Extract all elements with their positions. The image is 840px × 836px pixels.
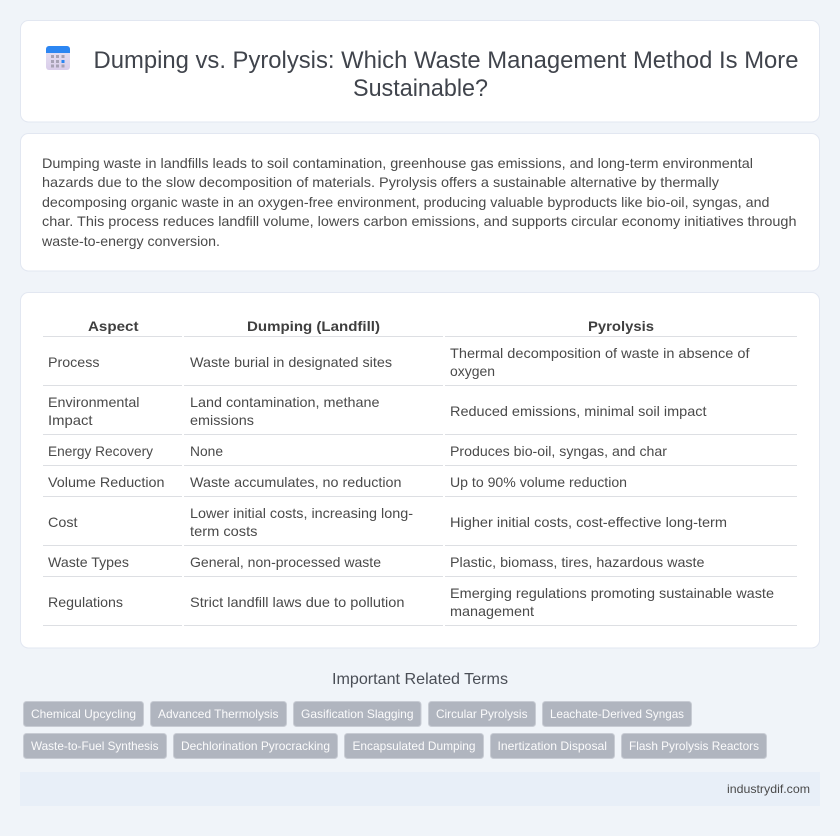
table header: Pyrolysis: [588, 318, 654, 334]
row: environmental impact: Environmental: [48, 394, 140, 410]
row: environmental impact: Reduced emissions, minimal soil impact: [450, 403, 707, 419]
row: regulations: [48, 585, 774, 619]
tag: Waste-to-Fuel Synthesis: Waste-to-Fuel Synthesis: [31, 739, 158, 753]
related terms heading: Important Related Terms: [332, 671, 508, 688]
tag: Inertization Disposal: [490, 734, 614, 758]
row: waste types: [48, 554, 705, 570]
tag: Waste-to-Fuel Synthesis: [24, 734, 166, 758]
row: cost: Higher initial costs, cost-effective long-term: [450, 514, 727, 530]
row: energy recovery: Produces bio-oil, syngas, and char: [450, 443, 667, 459]
footer bar: [20, 772, 820, 806]
row: waste types: Waste Types: [48, 554, 129, 570]
row: process: Thermal decomposition of waste in absence of: [450, 345, 750, 361]
row: cost: Cost: [48, 514, 78, 530]
table header: Aspect: [88, 318, 139, 334]
table header: Dumping (Landfill): [247, 318, 380, 334]
description text: Dumping waste in landfills leads to soil contamination, greenhouse gas emissions, and long-term environmental: [42, 155, 753, 171]
row: energy recovery: [48, 443, 667, 459]
title: Sustainable?: [353, 75, 488, 102]
description text: hazards due to the slow decomposition of materials. Pyrolysis offers a sustainable alternative by thermally: [42, 174, 719, 190]
tag: Advanced Thermolysis: [150, 702, 286, 726]
tag: Inertization Disposal: Inertization Disposal: [498, 739, 607, 753]
row: environmental impact: emissions: [190, 412, 254, 428]
icon: calendar: [46, 46, 70, 70]
row: volume reduction: [48, 474, 627, 490]
tag: Chemical Upcycling: [24, 702, 144, 726]
row: energy recovery: None: [190, 443, 223, 459]
row: regulations: Regulations: [48, 594, 123, 610]
row: cost: [48, 505, 727, 539]
row: volume reduction: Up to 90% volume reduction: [450, 474, 627, 490]
row: volume reduction: Waste accumulates, no reduction: [190, 474, 402, 490]
description panel: [20, 134, 820, 271]
description text: [41, 155, 797, 249]
row: environmental impact: Land contamination, methane: [190, 394, 380, 410]
row: cost: Lower initial costs, increasing long-: [190, 505, 413, 521]
tag: Dechlorination Pyrocracking: Dechlorination Pyrocracking: [181, 739, 330, 753]
table header: [88, 318, 654, 334]
row: volume reduction: Volume Reduction: [48, 474, 164, 490]
description text: decomposing organic waste in an oxygen-free environment, producing valuable byproducts like bio-oil, syngas, and: [42, 194, 770, 210]
tag: Gasification Slagging: [294, 702, 421, 726]
tag: Advanced Thermolysis: Advanced Thermolysis: [158, 707, 278, 721]
row: regulations: Strict landfill laws due to pollution: [190, 594, 404, 610]
tag: Leachate-Derived Syngas: [542, 702, 692, 726]
row: process: [48, 345, 750, 379]
related term tags: [24, 702, 766, 758]
tag: Gasification Slagging: Gasification Slagging: [301, 707, 414, 721]
footer source text: industrydif.com: [727, 782, 810, 796]
tag: Flash Pyrolysis Reactors: [622, 734, 766, 758]
row: environmental impact: Impact: [48, 412, 93, 428]
comparison table panel: [20, 292, 820, 648]
tag: Encapsulated Dumping: [344, 734, 484, 758]
tag: Leachate-Derived Syngas: Leachate-Derived Syngas: [550, 707, 684, 721]
tag: Flash Pyrolysis Reactors: Flash Pyrolysis Reactors: [629, 739, 759, 753]
header panel: [20, 20, 820, 122]
row: process: Waste burial in designated sites: [190, 354, 392, 370]
row: process: Process: [48, 354, 100, 370]
row: regulations: management: [450, 603, 534, 619]
row: cost: term costs: [190, 523, 258, 539]
row: environmental impact: [48, 394, 707, 428]
tag: Encapsulated Dumping: Encapsulated Dumping: [352, 739, 476, 753]
title: [94, 47, 798, 102]
row: energy recovery: Energy Recovery: [48, 443, 153, 459]
row: regulations: Emerging regulations promoting sustainable waste: [450, 585, 774, 601]
row: waste types: General, non-processed waste: [190, 554, 381, 570]
tag: Circular Pyrolysis: Circular Pyrolysis: [436, 707, 528, 721]
tag: Chemical Upcycling: Chemical Upcycling: [31, 707, 136, 721]
tag: Dechlorination Pyrocracking: [174, 734, 338, 758]
tag: Circular Pyrolysis: [428, 702, 536, 726]
row: process: oxygen: [450, 363, 495, 379]
description text: char. This process reduces landfill volume, lowers carbon emissions, and supports circular economy initiatives through: [42, 213, 796, 229]
row: waste types: Plastic, biomass, tires, hazardous waste: [450, 554, 705, 570]
description text: waste-to-energy conversion.: [41, 233, 220, 249]
title: Dumping vs. Pyrolysis: Which Waste Management Method Is More: [94, 47, 798, 74]
